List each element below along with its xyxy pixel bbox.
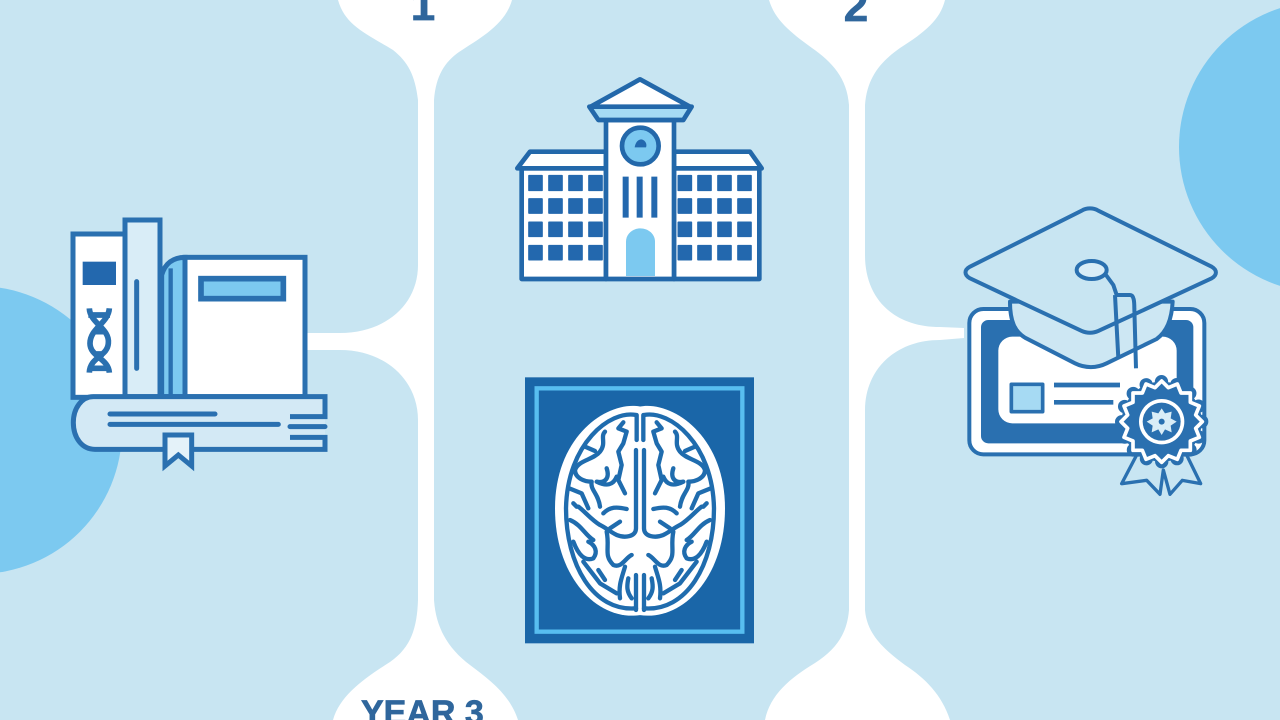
book three [162, 257, 305, 397]
tassel [1077, 261, 1136, 368]
award ribbons [1122, 455, 1201, 494]
brain right hemisphere [639, 406, 725, 616]
scan frame [525, 377, 754, 643]
award seal [1121, 381, 1202, 462]
book two spine [125, 220, 160, 397]
diploma [969, 309, 1204, 454]
icon: brain scan [525, 377, 754, 643]
bookmark [165, 435, 192, 466]
timeline connector right [765, 0, 964, 720]
icon: graduation cap and diploma [965, 208, 1216, 494]
bottom book lying flat [73, 397, 325, 449]
brain left hemisphere [555, 406, 641, 616]
tower roof [589, 79, 692, 120]
clock tower [606, 120, 674, 279]
accent circle left [0, 286, 122, 574]
timeline connector left [305, 0, 518, 720]
cap base [1010, 302, 1173, 367]
accent circle right [1179, 1, 1280, 293]
cap top board [965, 208, 1216, 333]
book one spine [73, 234, 125, 397]
icon: stack of books [73, 220, 325, 466]
left wing [517, 152, 606, 279]
icon: university building [517, 79, 762, 279]
clock [622, 128, 659, 164]
right wing [674, 152, 762, 279]
